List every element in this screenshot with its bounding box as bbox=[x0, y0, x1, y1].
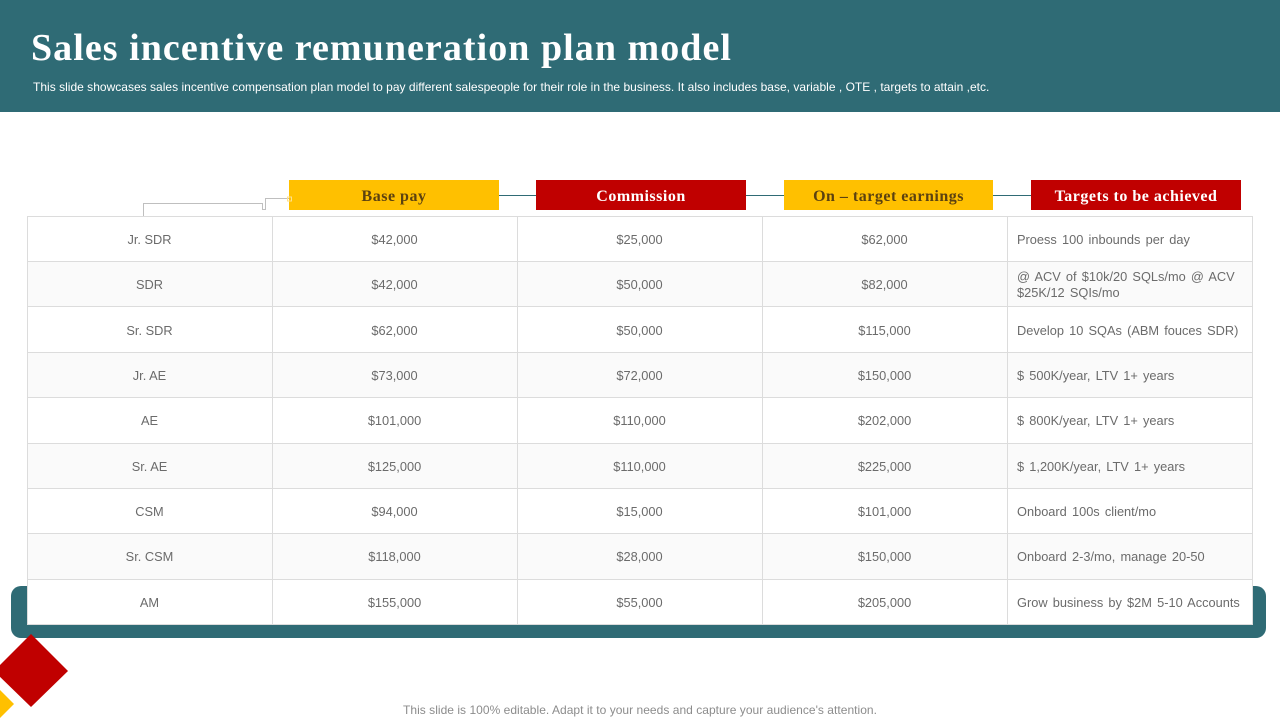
row: Sr. CSM: $118,000 bbox=[368, 549, 421, 564]
row: AE: $202,000 bbox=[858, 413, 911, 428]
row: CSM: Onboard 100s client/mo bbox=[1017, 504, 1156, 518]
row: Jr. SDR: $62,000 bbox=[861, 232, 908, 246]
header: Commission bbox=[536, 180, 746, 210]
row: Jr. AE: $ 500K/year, LTV 1+ years bbox=[1017, 368, 1174, 382]
row: Jr. SDR: $25,000 bbox=[616, 232, 663, 246]
row: AE: $ 800K/year, LTV 1+ years bbox=[1017, 413, 1174, 428]
row: AM: Grow business by $2M 5-10 Accounts bbox=[1017, 594, 1240, 610]
row: AE: $110,000 bbox=[613, 413, 666, 428]
row: Jr. SDR: Proess 100 inbounds per day bbox=[1017, 232, 1190, 246]
row: CSM: $94,000 bbox=[371, 504, 418, 518]
row: SDR: $50,000 bbox=[616, 276, 663, 292]
row: SDR: $82,000 bbox=[861, 276, 908, 292]
row: AM: AM bbox=[140, 594, 159, 610]
header: Base pay bbox=[289, 180, 499, 210]
row: SDR: $42,000 bbox=[371, 276, 418, 292]
row: Jr. SDR: Jr. SDR bbox=[127, 232, 172, 246]
row: Sr. CSM: $28,000 bbox=[616, 549, 663, 564]
row: Jr. AE: Jr. AE bbox=[133, 368, 166, 382]
row: CSM: CSM bbox=[135, 504, 164, 518]
header: Targets to be achieved bbox=[1031, 180, 1241, 210]
title: Sales incentive remuneration plan model bbox=[31, 27, 732, 69]
row: Sr. AE bbox=[27, 443, 1253, 489]
row: AE: AE bbox=[141, 413, 158, 428]
row: Jr. AE: $73,000 bbox=[371, 368, 418, 382]
row: Sr. SDR: Develop 10 SQAs (ABM fouces SDR) bbox=[1017, 322, 1238, 338]
subtitle: This slide showcases sales incentive compensation plan model to pay different salespeople for their role in the business. It also includes base, variable , OTE , targets to attain ,etc. bbox=[33, 80, 989, 94]
row: AM: $155,000 bbox=[368, 594, 421, 610]
row: AM bbox=[27, 579, 1253, 625]
row: CSM: $101,000 bbox=[858, 504, 911, 518]
row: SDR: @ ACV of $10k/20 SQLs/mo @ ACV $25K/12 SQIs/mo bbox=[1017, 268, 1235, 300]
row: Sr. CSM: Sr. CSM bbox=[126, 549, 173, 564]
row: Jr. SDR bbox=[27, 216, 1253, 262]
row: Jr. AE: $72,000 bbox=[616, 368, 663, 382]
row: Sr. AE: $125,000 bbox=[368, 458, 421, 474]
row: Sr. SDR bbox=[27, 307, 1253, 353]
row: Sr. AE: $225,000 bbox=[858, 458, 911, 474]
row: Sr. AE: $110,000 bbox=[613, 458, 666, 474]
header band bbox=[0, 0, 1280, 112]
row: Sr. CSM: $150,000 bbox=[858, 549, 911, 564]
row: AE bbox=[27, 398, 1253, 443]
icon: decorative diamonds bbox=[0, 634, 68, 718]
header: On-target earnings bbox=[784, 180, 993, 210]
row: Sr. SDR: $62,000 bbox=[371, 322, 418, 338]
row: AE: $101,000 bbox=[368, 413, 421, 428]
row: Sr. CSM: Onboard 2-3/mo, manage 20-50 bbox=[1017, 549, 1205, 564]
row: Sr. CSM bbox=[27, 534, 1253, 579]
connector: table to header bbox=[143, 196, 292, 216]
row: Jr. AE: $150,000 bbox=[858, 368, 911, 382]
row: AM: $205,000 bbox=[858, 594, 911, 610]
row: Sr. SDR: $50,000 bbox=[616, 322, 663, 338]
row: Sr. AE: Sr. AE bbox=[132, 458, 167, 474]
row: CSM: $15,000 bbox=[616, 504, 663, 518]
row: Jr. AE bbox=[27, 352, 1253, 398]
row: Sr. SDR: Sr. SDR bbox=[126, 322, 173, 338]
row: Sr. SDR: $115,000 bbox=[858, 322, 911, 338]
row: CSM bbox=[27, 488, 1253, 534]
header: Base pay: Base pay bbox=[362, 188, 426, 205]
footer note: This slide is 100% editable. Adapt it to your needs and capture your audience's attention. bbox=[403, 703, 877, 717]
row: Sr. AE: $ 1,200K/year, LTV 1+ years bbox=[1017, 458, 1185, 474]
teal frame behind table bbox=[11, 586, 1266, 638]
row: AM: $55,000 bbox=[616, 594, 663, 610]
connector lines between headers bbox=[499, 195, 1031, 196]
row: Jr. SDR: $42,000 bbox=[371, 232, 418, 246]
header: On-target earnings: On – target earnings bbox=[813, 188, 964, 205]
header: Commission: Commission bbox=[596, 188, 686, 205]
header: Targets to be achieved: Targets to be achieved bbox=[1055, 188, 1217, 205]
row: SDR bbox=[27, 261, 1253, 307]
row: SDR: SDR bbox=[136, 276, 163, 292]
